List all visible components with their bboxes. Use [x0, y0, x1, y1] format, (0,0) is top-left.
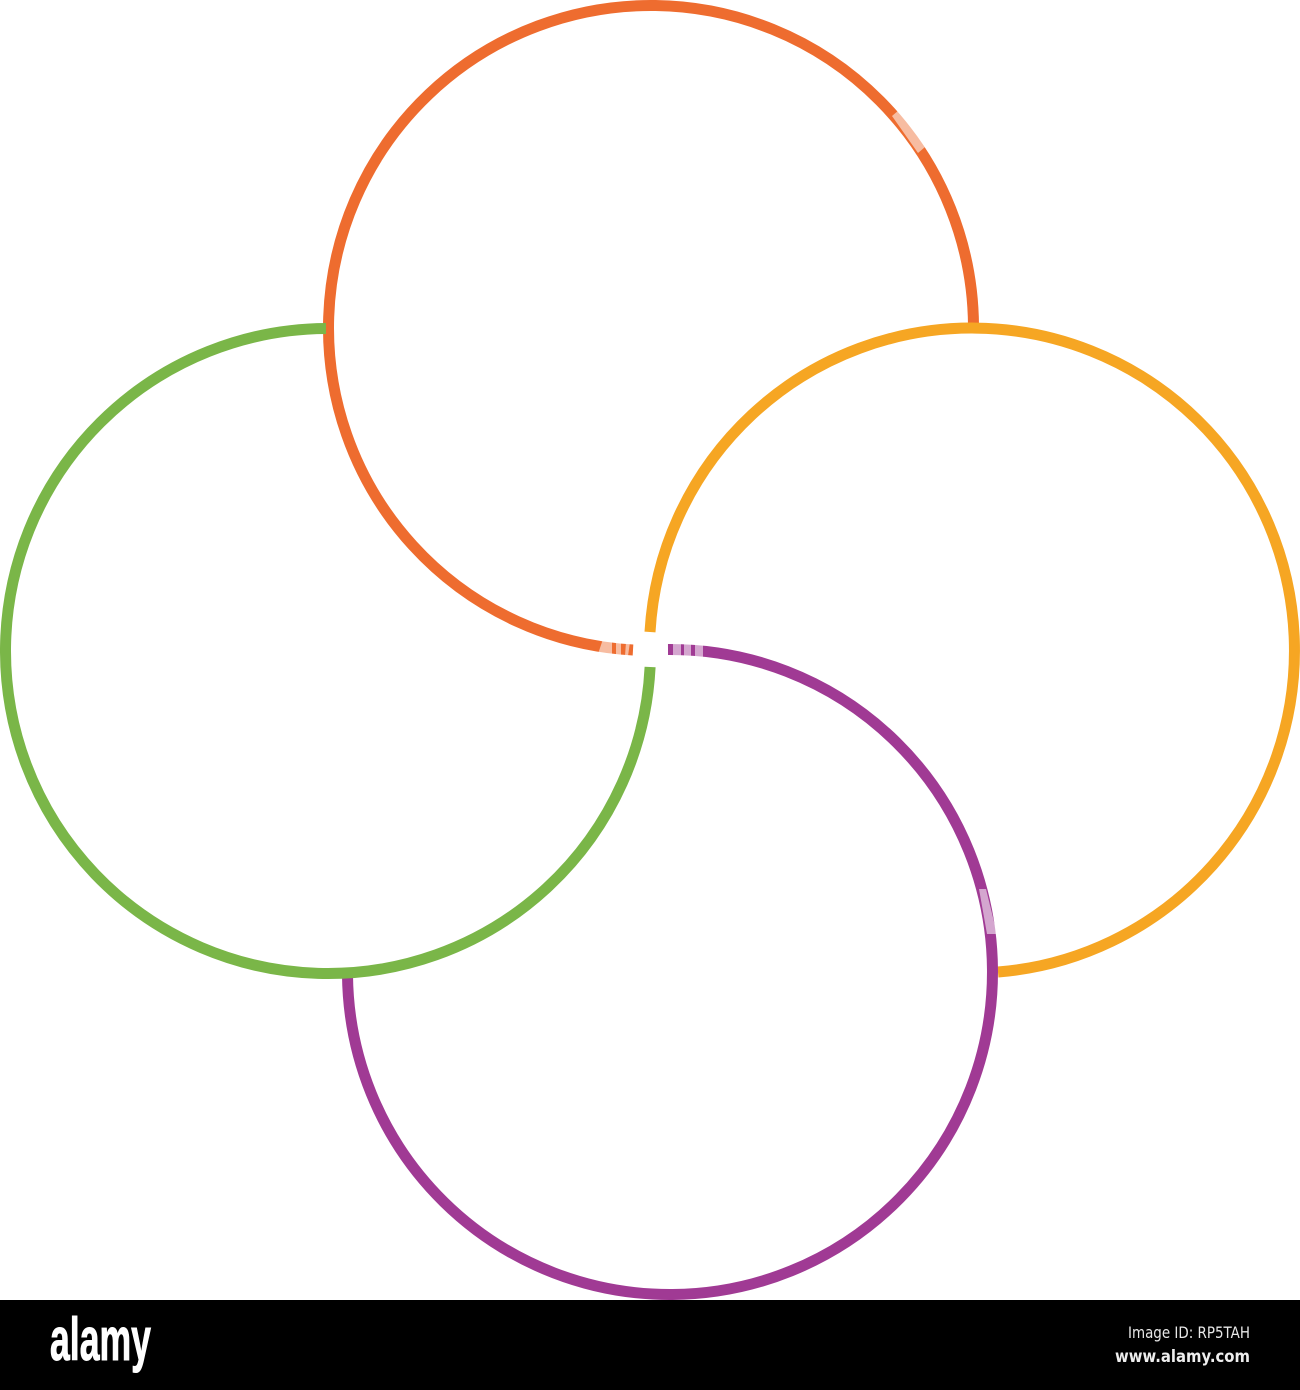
watermark: purple arc right — [979, 889, 997, 934]
arc: orange circle — [329, 6, 974, 650]
watermark: orange arc near centre — [598, 639, 630, 656]
website text: www.alamy.com — [1115, 1347, 1250, 1367]
footer bar — [0, 1300, 1300, 1390]
watermark remnants on the arcs — [598, 110, 997, 934]
watermark: orange arc upper right — [892, 110, 925, 153]
arc: yellow circle — [650, 328, 1294, 972]
arc: purple circle — [348, 649, 992, 1294]
arc: green circle — [5, 328, 650, 973]
image id text: Image ID: RP5TAH — [1128, 1323, 1250, 1342]
watermark: purple arc near centre — [673, 643, 703, 658]
logo: alamy wordmark: alamy — [50, 1306, 151, 1373]
